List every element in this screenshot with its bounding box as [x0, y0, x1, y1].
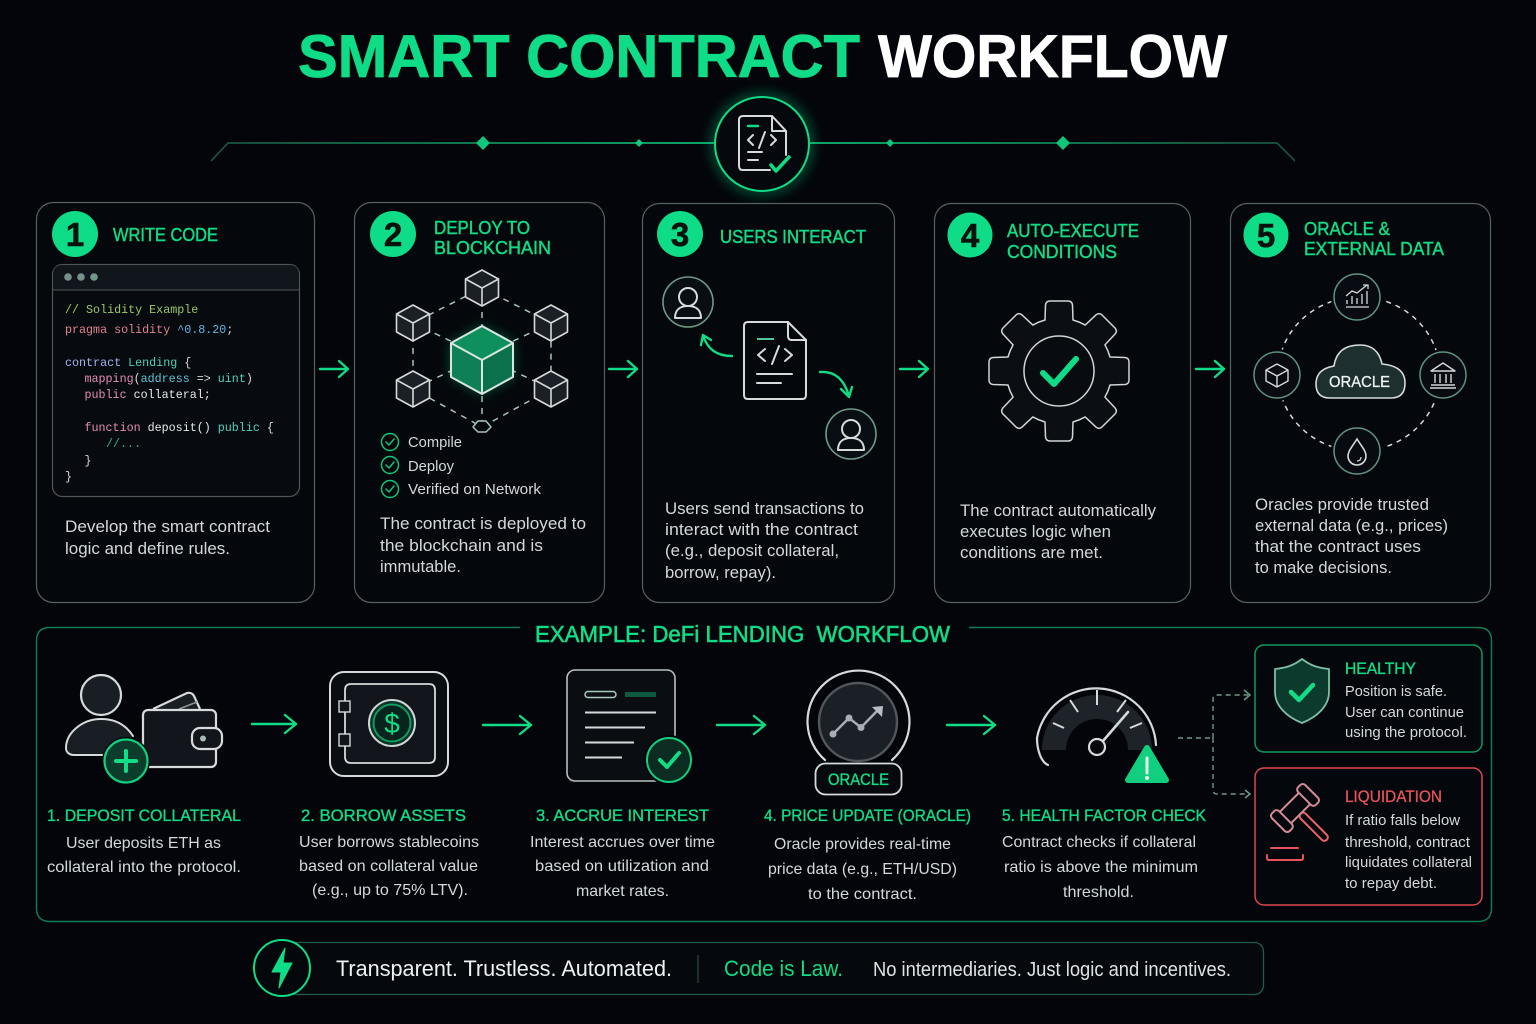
health check caption: threshold. [1063, 884, 1134, 901]
panel: step 4 auto-execute [934, 204, 1190, 602]
example heading: EXAMPLE: DeFi LENDING WORKFLOW [535, 621, 950, 647]
step 5 number badge: 5 [1257, 217, 1275, 254]
icon: safe vault: $ [384, 708, 400, 739]
arrow: deposit to borrow [252, 715, 296, 733]
icon: oracle price globe [808, 671, 910, 794]
borrow caption: User borrows stablecoins [299, 834, 479, 851]
oracle caption: Oracle provides real-time [774, 836, 951, 853]
step 4 description: conditions are met. [960, 544, 1103, 562]
icon: contract document badge [715, 97, 809, 191]
code editor window: //... [106, 437, 141, 451]
title: WORKFLOW [878, 23, 1227, 90]
panel: step 2 deploy [354, 202, 604, 602]
health check caption: ratio is above the minimum [1004, 859, 1198, 876]
oracle caption: to the contract. [808, 886, 917, 903]
borrow caption: 2. BORROW ASSETS [301, 807, 466, 825]
title: SMART CONTRACT [298, 23, 860, 90]
code editor window: mapping(address => uint) [84, 372, 253, 386]
step 4 description: The contract automatically [960, 502, 1157, 520]
icon: oracle price globe: ORACLE [828, 771, 889, 789]
step 3 heading: USERS INTERACT [720, 226, 866, 247]
panel: step 3 users interact [642, 204, 894, 602]
healthy text: using the protocol. [1345, 725, 1467, 741]
step 4 number badge [948, 212, 992, 258]
slogan: Transparent. Trustless. Automated. [336, 956, 672, 981]
branching dashed arrows [1178, 690, 1250, 798]
health check caption: 5. HEALTH FACTOR CHECK [1002, 807, 1206, 825]
blockchain network icon [396, 270, 568, 432]
code editor window [52, 264, 300, 496]
healthy text [1345, 660, 1467, 741]
interest caption: market rates. [576, 883, 669, 900]
oracle network icon [1251, 271, 1469, 477]
healthy text: HEALTHY [1345, 660, 1416, 678]
step 5 heading: ORACLE & [1304, 218, 1391, 239]
healthy text: User can continue [1345, 705, 1464, 721]
step 2 heading [434, 217, 551, 258]
icon: shield [1275, 659, 1329, 723]
header divider with diamonds [211, 136, 1295, 161]
step 5 description: Oracles provide trusted [1255, 496, 1429, 514]
liquidation text: threshold, contract [1345, 835, 1470, 851]
step 1 heading: WRITE CODE [113, 224, 218, 245]
icon: user and wallet [66, 675, 222, 785]
deposit caption: 1. DEPOSIT COLLATERAL [47, 807, 241, 825]
liquidation text: If ratio falls below [1345, 813, 1461, 829]
deposit caption [47, 807, 241, 876]
icon: gavel [1267, 783, 1343, 860]
liquidation text: LIQUIDATION [1345, 788, 1442, 806]
step 5 heading [1304, 218, 1445, 259]
code editor window: // Solidity Example [65, 303, 198, 317]
step 2 description: immutable. [380, 558, 461, 576]
deposit caption: collateral into the protocol. [47, 859, 241, 876]
step 2 description: The contract is deployed to [380, 515, 586, 533]
step 2 heading: BLOCKCHAIN [434, 237, 551, 258]
borrow caption: (e.g., up to 75% LTV). [312, 882, 468, 899]
step 1 description: Develop the smart contract [65, 518, 270, 536]
step 1 description: logic and define rules. [65, 540, 230, 558]
deployment checklist: Compile [408, 435, 462, 451]
code editor window: } [65, 470, 72, 484]
step 4 number badge: 4 [961, 217, 980, 254]
icon: lightning bolt [254, 940, 310, 996]
oracle caption: price data (e.g., ETH/USD) [768, 861, 957, 878]
borrow caption: based on collateral value [299, 858, 478, 875]
icon: health gauge [1037, 688, 1166, 780]
users and contract icon [663, 277, 876, 459]
step 4 description: executes logic when [960, 523, 1111, 541]
step 4 heading [1007, 220, 1139, 262]
step 1 number badge [52, 211, 98, 257]
step 2 heading: DEPLOY TO [434, 217, 530, 238]
callout: liquidation [1255, 768, 1482, 905]
arrow: step 3 to 4 [900, 361, 928, 377]
panel: DeFi lending example [36, 621, 1492, 922]
step 2 number badge: 2 [384, 216, 402, 253]
interest caption: based on utilization and [535, 858, 709, 875]
step 3 number badge [657, 211, 703, 257]
step 3 description: interact with the contract [665, 521, 858, 539]
step 3 description [665, 500, 864, 582]
callout: healthy [1255, 645, 1482, 752]
arrow: step 4 to 5 [1196, 361, 1224, 377]
step 2 description [380, 515, 586, 576]
arrow: borrow to interest [483, 716, 531, 734]
liquidation text [1345, 788, 1472, 892]
step 4 heading: AUTO-EXECUTE [1007, 220, 1139, 241]
borrow caption [299, 807, 479, 899]
step 2 number badge [370, 211, 416, 257]
code is law: Code is Law. [724, 956, 843, 981]
deposit caption: User deposits ETH as [66, 835, 221, 852]
liquidation text: liquidates collateral [1345, 855, 1472, 871]
step 4 heading: CONDITIONS [1007, 241, 1117, 262]
step 1 description [65, 518, 270, 558]
arrow: oracle to health check [947, 716, 995, 734]
health check caption: Contract checks if collateral [1002, 834, 1196, 851]
oracle caption: 4. PRICE UPDATE (ORACLE) [764, 807, 971, 825]
deployment checklist: Verified on Network [408, 482, 542, 498]
health check caption [1002, 807, 1206, 901]
panel: step 1 write code [36, 202, 314, 602]
icon: safe vault [330, 672, 448, 776]
step 3 description: (e.g., deposit collateral, [665, 542, 839, 560]
step 2 description: the blockchain and is [380, 537, 543, 555]
step 5 description: that the contract uses [1255, 538, 1421, 556]
title [298, 23, 1227, 90]
healthy text: Position is safe. [1345, 684, 1447, 700]
oracle caption [764, 807, 971, 903]
code editor window: public collateral; [84, 388, 211, 402]
gear with check icon [989, 301, 1129, 441]
liquidation text: to repay debt. [1345, 876, 1437, 892]
step 5 heading: EXTERNAL DATA [1304, 238, 1445, 259]
step 5 description: external data (e.g., prices) [1255, 517, 1448, 535]
step 5 description [1255, 496, 1448, 577]
code editor window: function deposit() public { [84, 421, 274, 435]
step 5 number badge [1244, 212, 1288, 258]
panel: step 5 oracle [1230, 204, 1490, 602]
tagline: No intermediaries. Just logic and incentives. [873, 959, 1231, 981]
interest caption: Interest accrues over time [530, 834, 715, 851]
arrow: step 2 to 3 [609, 361, 637, 377]
step 3 number badge: 3 [671, 216, 689, 253]
code editor window: } [84, 454, 92, 468]
step 3 description: Users send transactions to [665, 500, 864, 518]
step 4 description [960, 502, 1157, 562]
interest caption [530, 807, 715, 900]
footer banner [254, 940, 1264, 996]
deployment checklist: Deploy [408, 459, 455, 475]
code editor window: pragma solidity ^0.8.20; [65, 323, 233, 337]
step 5 description: to make decisions. [1255, 559, 1392, 577]
arrow: interest to oracle [717, 716, 765, 734]
arrow: step 1 to 2 [320, 361, 348, 377]
step 3 description: borrow, repay). [665, 564, 776, 582]
icon: interest statement [567, 670, 694, 785]
oracle network icon: ORACLE [1329, 374, 1390, 391]
interest caption: 3. ACCRUE INTEREST [536, 807, 709, 825]
code editor window: contract Lending { [65, 356, 191, 370]
deployment checklist [382, 434, 542, 498]
step 1 number badge: 1 [66, 216, 84, 253]
